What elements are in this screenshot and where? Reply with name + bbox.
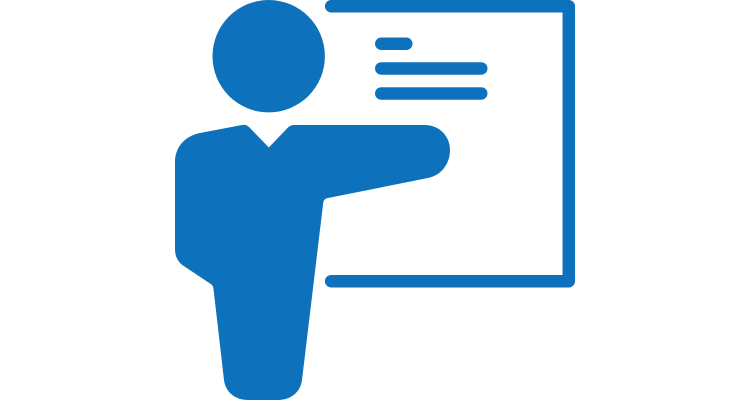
icon: presenter head [213,0,325,112]
icon: presenter body with pointing arm [175,125,450,400]
text lines on whiteboard [375,38,488,100]
icon: whiteboard frame [331,6,569,281]
